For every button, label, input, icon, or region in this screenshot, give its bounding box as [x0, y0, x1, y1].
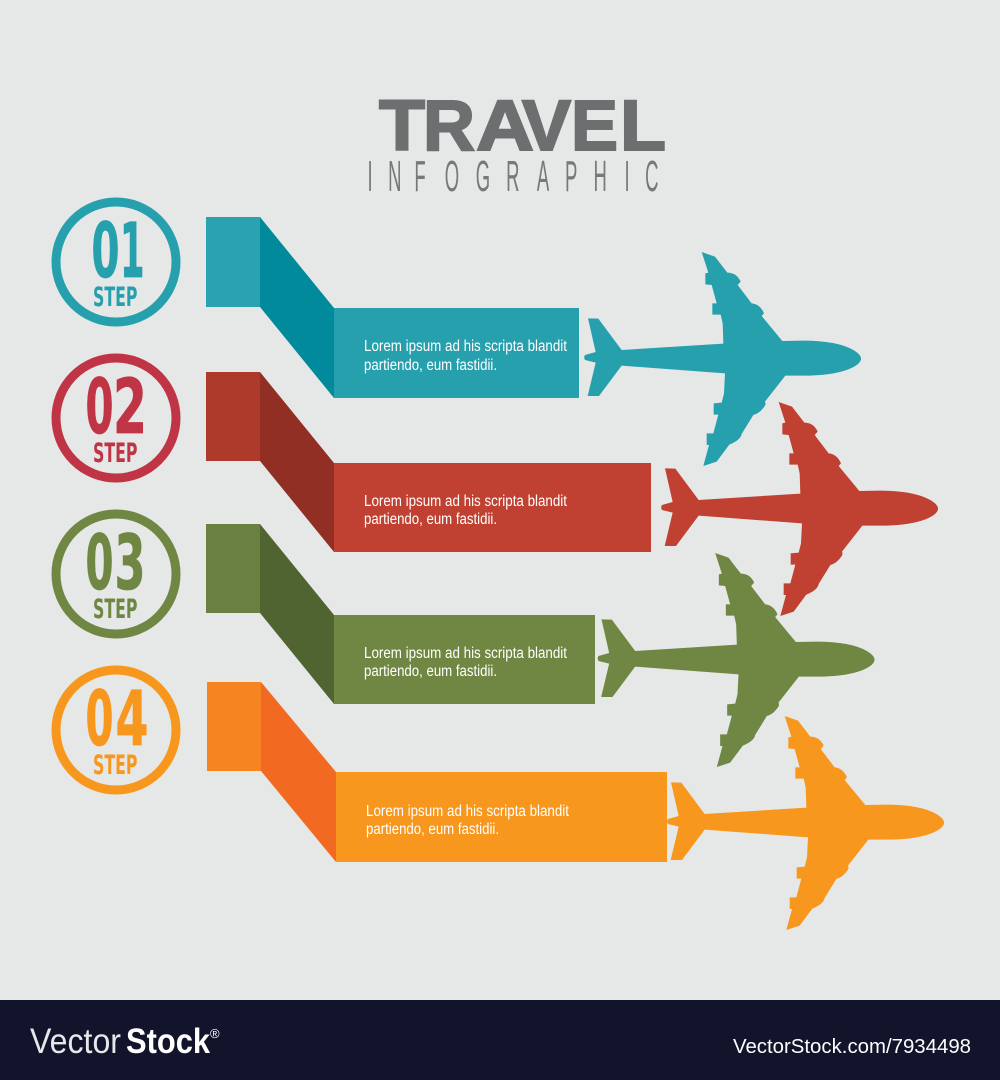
heading: TRAVEL: V [522, 87, 571, 166]
ribbon 3: green: partiendo, eum fastidii. [364, 663, 497, 680]
step 03 badge: 3 [114, 518, 146, 607]
heading: TRAVEL [379, 87, 666, 166]
heading: TRAVEL: L [620, 87, 666, 166]
step 03 badge [56, 514, 176, 634]
ribbon 4: orange: partiendo, eum fastidii. [366, 821, 499, 838]
footer image id: VectorStock.com/7934498 [733, 1036, 971, 1058]
title [367, 87, 666, 201]
step 01 badge [56, 202, 176, 322]
step 02 badge: 2 [113, 362, 147, 451]
ribbon 1: teal: partiendo, eum fastidii. [364, 357, 497, 374]
heading: TRAVEL: A [476, 87, 534, 166]
ribbon 1: teal [206, 217, 579, 398]
footer logo: Stock [126, 1022, 210, 1061]
footer logo: ® [210, 1026, 220, 1041]
footer logo [30, 1022, 220, 1061]
step 04 badge: 0 [86, 674, 114, 763]
ribbon 3: green [206, 524, 595, 704]
ribbon 2: red: Lorem ipsum ad his scripta blandit [364, 493, 568, 510]
heading: TRAVEL: E [571, 87, 618, 166]
step 01 badge: STEP [93, 282, 138, 313]
ribbon 2: red: partiendo, eum fastidii. [364, 511, 497, 528]
ribbon 1: teal: Lorem ipsum ad his scripta blandit [364, 338, 568, 355]
step 02 badge: 0 [86, 362, 114, 451]
step 01 badge: 1 [120, 206, 144, 295]
step 02 badge: STEP [93, 438, 138, 469]
footer bar [0, 1000, 1000, 1080]
step 03 badge: 0 [86, 518, 114, 607]
step 04 badge: 4 [116, 674, 148, 763]
ribbon 3: green: Lorem ipsum ad his scripta blandit [364, 645, 568, 662]
ribbon 2: red [206, 372, 651, 552]
heading: TRAVEL: T [379, 87, 425, 166]
step 04 badge: STEP [93, 750, 138, 781]
icon: green airplane [598, 553, 875, 767]
step 03 badge: STEP [93, 594, 138, 625]
subheading: INFOGRAPHIC: INFOGRAPHIC [367, 152, 659, 201]
ribbon 4: orange [207, 682, 667, 862]
icon: red airplane [661, 402, 938, 616]
ribbon 4: orange: Lorem ipsum ad his scripta blandit [366, 803, 570, 820]
step 01 badge: 0 [92, 206, 120, 295]
step 02 badge [56, 358, 176, 478]
footer logo: Vector [30, 1022, 121, 1061]
icon: teal airplane [584, 252, 861, 466]
icon: orange airplane [667, 716, 944, 930]
step 04 badge [56, 670, 176, 790]
heading: TRAVEL: R [423, 87, 475, 166]
